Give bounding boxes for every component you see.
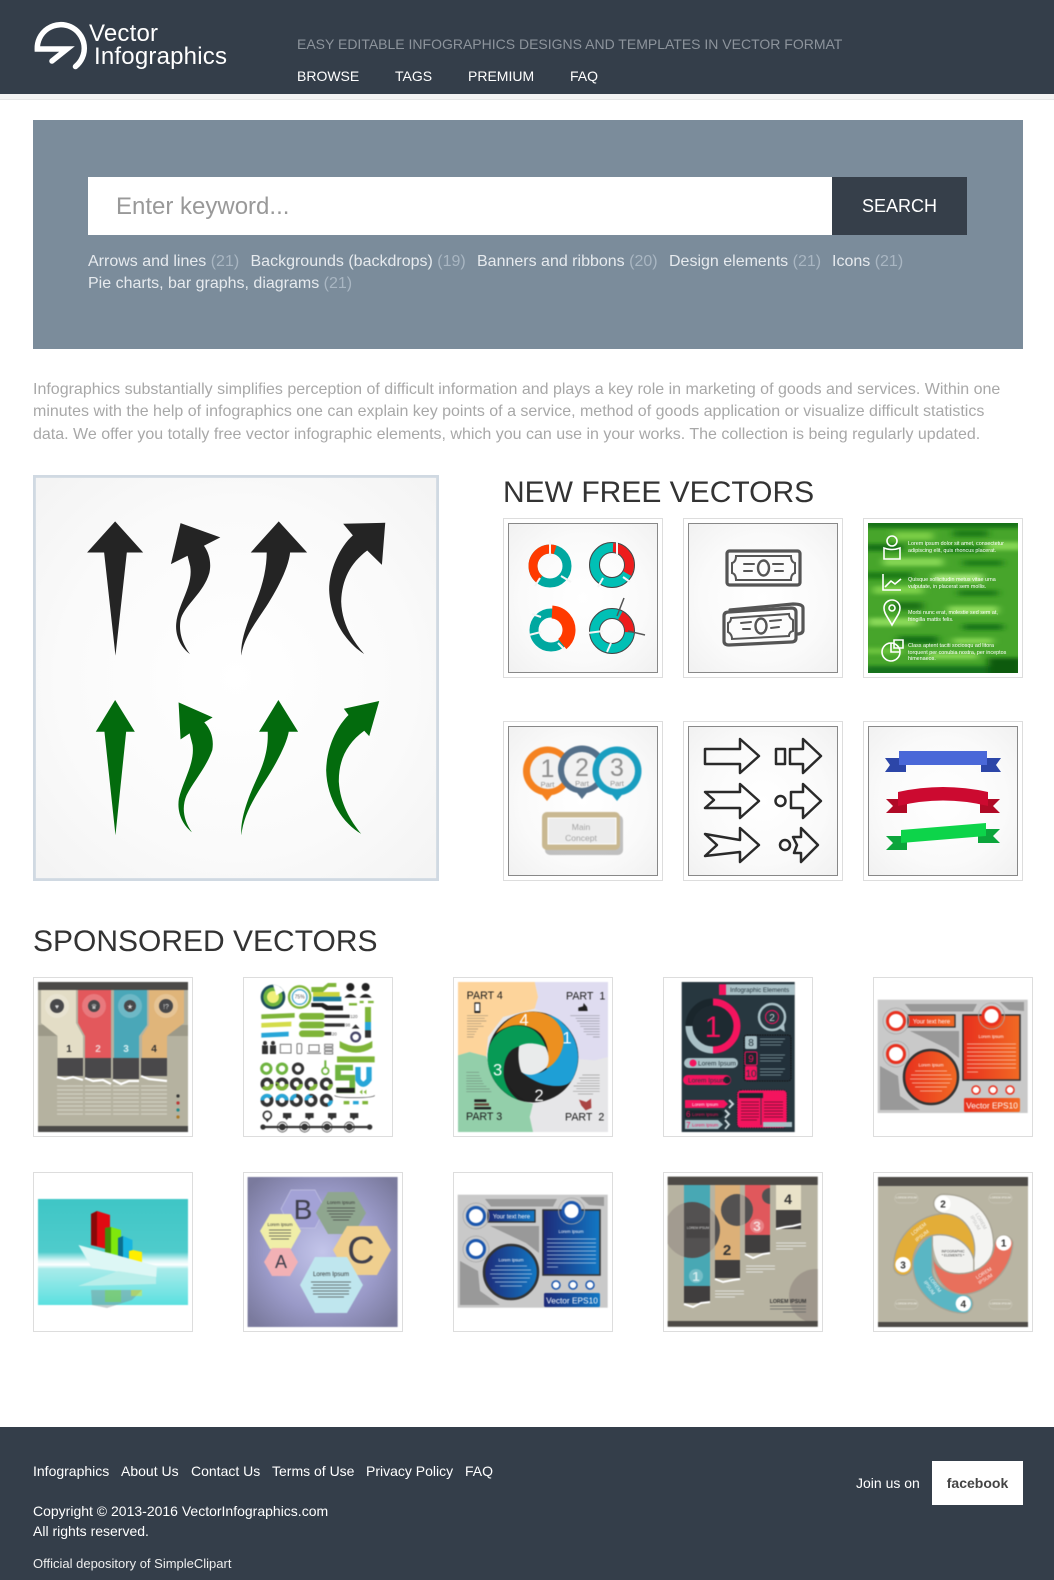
- sponsored: four arc ring: LOREM IPSUM: [896, 1302, 917, 1306]
- thumbnail: part bubbles: Part: [610, 779, 625, 788]
- list text: Class aptent taciti sociosqu ad litora: [908, 643, 994, 649]
- sponsored: dark infographic elements: Lorem Ipsum: [698, 1060, 736, 1068]
- category tags: Arrows and lines (21): [88, 253, 239, 270]
- list icons: [882, 536, 903, 661]
- sponsored: red template: Your text here: [913, 1020, 951, 1026]
- logo: Infographics: [94, 43, 227, 70]
- sponsored: infographic elements set: 75%: [295, 995, 305, 1001]
- sponsored: four tab infographic: [33, 977, 193, 1137]
- sponsored: four arc ring: IPSUM: [968, 1215, 981, 1232]
- sponsored: paper boat bar chart: [33, 1172, 193, 1332]
- category tags: [88, 253, 903, 292]
- list text: adipiscing elit, quis rhoncus placerat.: [908, 548, 996, 554]
- tagline: EASY EDITABLE INFOGRAPHICS DESIGNS AND TEMPLATES IN VECTOR FORMAT: [297, 36, 842, 52]
- thumbnail: part bubbles: Part: [575, 779, 590, 788]
- sponsored: four part spiral: 1: [562, 1029, 572, 1048]
- sponsored: four tab infographic: ★: [127, 1003, 133, 1011]
- list text: fringilla mattis felis.: [908, 617, 954, 623]
- sponsored: four part spiral: 3: [493, 1060, 502, 1079]
- sponsored: hexagons ABC: A: [275, 1252, 287, 1272]
- thumbnail: part bubbles: 1: [541, 755, 554, 783]
- sponsored: hexagons ABC: C: [347, 1230, 375, 1272]
- thumbnail: part bubbles: 3: [610, 754, 624, 782]
- sponsored: dark infographic elements: 10: [745, 1069, 757, 1080]
- sponsored: blue template: Your text here: [493, 1214, 531, 1220]
- list text: torquent per conubia nostra, per inceptos: [908, 650, 1007, 656]
- search button: [832, 177, 967, 235]
- sponsored: four tab infographic: ♛: [91, 1003, 97, 1011]
- sponsored: four tab infographic: !?: [163, 1004, 169, 1011]
- sponsored: hexagons ABC: [243, 1172, 403, 1332]
- sponsored: hanging tabs: 2: [723, 1242, 731, 1259]
- sponsored: infographic elements set: 98: [345, 1023, 351, 1028]
- sponsored: four part spiral: PART 2: [565, 1111, 604, 1123]
- sponsored: four arc ring: LOREM: [927, 1276, 942, 1294]
- list text: vulputate, in placerat sem mollis.: [908, 584, 986, 590]
- sponsored: hanging tabs: LOREM IPSUM: [770, 1299, 806, 1305]
- sponsored: four arc ring: 3: [900, 1260, 906, 1271]
- footer links: Contact Us: [191, 1463, 260, 1479]
- thumbnail: part bubbles: Main: [572, 822, 590, 832]
- sponsored: four arc ring: 2: [940, 1199, 946, 1210]
- sponsored: dark infographic elements: Lorem Ipsum: [692, 1112, 719, 1117]
- sponsored: four part spiral: 4: [519, 1011, 529, 1030]
- sponsored: four tab infographic: 2: [95, 1044, 101, 1055]
- sponsored: blue template: Lorem Ipsum: [498, 1258, 524, 1262]
- blurred foliage: [868, 523, 1018, 673]
- thumbnail: part bubbles: Concept: [565, 833, 597, 843]
- search input: Enter keyword...: [116, 193, 289, 220]
- sponsored: dark infographic elements: 1: [705, 1011, 721, 1044]
- footer: [0, 1427, 1054, 1580]
- thumbnail: part bubbles: Part: [541, 780, 555, 789]
- sponsored: four arc ring: LOREM: [910, 1222, 928, 1237]
- intro paragraph: minutes with the help of infographics one can explain key points of a service, method of goods application or visualize difficult statistics: [33, 403, 984, 420]
- thumbnail: part bubbles: 2: [575, 754, 589, 782]
- thumbnail: money icons: [683, 518, 843, 678]
- sponsored: four arc ring: IPSUM: [977, 1273, 994, 1286]
- sponsored: four part spiral: PART 3: [466, 1111, 502, 1123]
- search input: [88, 177, 832, 235]
- copyright: [33, 1503, 328, 1539]
- sponsored: four part spiral: [453, 977, 613, 1137]
- sponsored: dark infographic elements: [663, 977, 813, 1137]
- sponsored: four arc ring: IPSUM: [914, 1229, 930, 1243]
- sponsored: four arc ring: LOREM IPSUM: [990, 1302, 1011, 1306]
- navigation: PREMIUM: [468, 68, 534, 84]
- navigation: [297, 68, 598, 84]
- sponsored: dark infographic elements: Lorem Ipsum: [692, 1122, 719, 1128]
- sponsored: dark infographic elements: Infographic Elements: [730, 987, 789, 994]
- navigation: FAQ: [570, 68, 598, 84]
- thumbnail: part bubbles: [503, 721, 663, 881]
- footer links: Terms of Use: [272, 1463, 354, 1479]
- sponsored: dark infographic elements: Lorem Ipsum: [692, 1102, 719, 1107]
- sponsored: infographic elements set: [243, 977, 393, 1137]
- list text: [908, 541, 1007, 662]
- sponsored: hanging tabs: 4: [784, 1191, 792, 1207]
- list text: Morbi nunc erat, molestie sed sem at,: [908, 610, 998, 616]
- heading: new free vectors: NEW FREE VECTORS: [503, 476, 814, 508]
- navigation: TAGS: [395, 68, 432, 84]
- list text: Lorem ipsum dolor sit amet, consectetur: [908, 541, 1004, 547]
- sponsored: red template: [873, 977, 1033, 1137]
- sponsored: red template: Vector EPS10: [966, 1100, 1018, 1110]
- sponsored: hanging tabs: 3: [753, 1218, 761, 1234]
- sponsored: four tab infographic: 3: [123, 1044, 129, 1055]
- sponsored: four part spiral: PART 4: [467, 990, 503, 1002]
- sponsored: dark infographic elements: Lorem Ipsum: [688, 1078, 726, 1084]
- category tags: Banners and ribbons (20): [477, 253, 658, 270]
- sponsored: infographic elements set: 120: [350, 1014, 358, 1019]
- sponsored: four arc ring: * ELEMENTS *: [942, 1253, 965, 1257]
- facebook button: [932, 1461, 1023, 1505]
- logo: [34, 20, 227, 70]
- sponsored: four arc ring: LOREM IPSUM: [990, 1196, 1011, 1200]
- sponsored: four arc ring: LOREM: [975, 1267, 993, 1281]
- sponsored: four part spiral: 2: [534, 1086, 544, 1105]
- sponsored: dark infographic elements: 5: [686, 1100, 691, 1109]
- green arrows: [96, 700, 379, 835]
- sponsored: dark infographic elements: 6: [686, 1110, 691, 1119]
- thumbnail: outline arrows: [683, 721, 843, 881]
- sponsored: hexagons ABC: Lorem Ipsum: [327, 1200, 355, 1206]
- sponsored: four tab infographic: 1: [66, 1044, 72, 1055]
- sponsored: blue template: Vector EPS10: [546, 1296, 598, 1306]
- sponsored: dark infographic elements: 7: [686, 1121, 691, 1130]
- footer links: FAQ: [465, 1463, 493, 1479]
- sponsored: hexagons ABC: Lorem Ipsum: [313, 1271, 349, 1278]
- depository note: Official depository of SimpleClipart: [33, 1556, 231, 1571]
- list text: himenaeos.: [908, 656, 936, 662]
- sponsored: hexagons ABC: Lorem Ipsum: [267, 1222, 293, 1227]
- sponsored: four tab infographic: ♥: [55, 1004, 59, 1011]
- copyright: Copyright © 2013-2016 VectorInfographics.com: [33, 1503, 328, 1519]
- sponsored: dark infographic elements: 2: [769, 1013, 775, 1024]
- copyright: All rights reserved.: [33, 1523, 149, 1539]
- sponsored: four part spiral: PART 1: [566, 991, 605, 1003]
- thumbnail: green infographic list: [863, 518, 1023, 678]
- sponsored: four arc ring: IPSUM: [922, 1280, 936, 1296]
- search button: SEARCH: [862, 196, 937, 216]
- footer links: [33, 1463, 493, 1479]
- sponsored: dark infographic elements: 8: [748, 1038, 754, 1049]
- black arrows: [87, 521, 385, 656]
- header bar: [0, 0, 1054, 94]
- sponsored: four arc ring: INFOGRAPHIC: [941, 1250, 965, 1254]
- sponsored: hanging tabs: 1: [692, 1269, 700, 1284]
- thumbnail: donut charts: [503, 518, 663, 678]
- sponsored: four arc ring: LOREM IPSUM: [896, 1196, 917, 1200]
- sponsored: four arc ring: [873, 1172, 1033, 1332]
- sponsored: blue template: [453, 1172, 613, 1332]
- footer links: Infographics: [33, 1463, 109, 1479]
- sponsored: four arc ring: 4: [961, 1299, 967, 1310]
- sponsored: blue template: Lorem Ipsum: [558, 1229, 584, 1234]
- footer links: About Us: [121, 1463, 179, 1479]
- featured image: arrows: [33, 475, 439, 881]
- navigation: BROWSE: [297, 68, 359, 84]
- intro paragraph: Infographics substantially simplifies perception of difficult information and plays a key role in marketing of goods and services. Within one: [33, 381, 1000, 398]
- sponsored: hanging tabs: LOREM IPSUM: [687, 1226, 709, 1230]
- category tags: Design elements (21): [669, 253, 821, 270]
- intro paragraph: [33, 381, 1000, 442]
- sponsored: dark infographic elements: 9: [748, 1054, 754, 1065]
- logo: Vector: [89, 20, 158, 47]
- sponsored: red template: Lorem Ipsum: [918, 1062, 944, 1068]
- sponsored: four tab infographic: 4: [151, 1044, 157, 1055]
- list text: Quisque sollicitudin metus vitae urna: [908, 577, 996, 583]
- sponsored: hexagons ABC: B: [294, 1194, 312, 1225]
- category tags: Icons (21): [832, 253, 903, 270]
- footer links: Privacy Policy: [366, 1463, 453, 1479]
- sponsored: red template: Lorem Ipsum: [978, 1034, 1004, 1039]
- sponsored: four arc ring: LOREM: [973, 1212, 988, 1231]
- heading: sponsored vectors: SPONSORED VECTORS: [33, 925, 378, 958]
- sponsored: four arc ring: 1: [1001, 1239, 1007, 1250]
- join us label: Join us on: [856, 1475, 920, 1491]
- sponsored: infographic elements set: 20: [332, 1031, 337, 1036]
- category tags: Backgrounds (backdrops) (19): [250, 253, 466, 270]
- facebook button: facebook: [947, 1475, 1008, 1491]
- panel: search: [33, 120, 1023, 349]
- intro paragraph: data. We offer you totally free vector infographic elements, which you can use in your works. The collection is being regularly updated.: [33, 426, 980, 442]
- thumbnail: ribbons: [863, 721, 1023, 881]
- category tags: Pie charts, bar graphs, diagrams (21): [88, 275, 352, 292]
- sponsored: hanging tabs: [663, 1172, 823, 1332]
